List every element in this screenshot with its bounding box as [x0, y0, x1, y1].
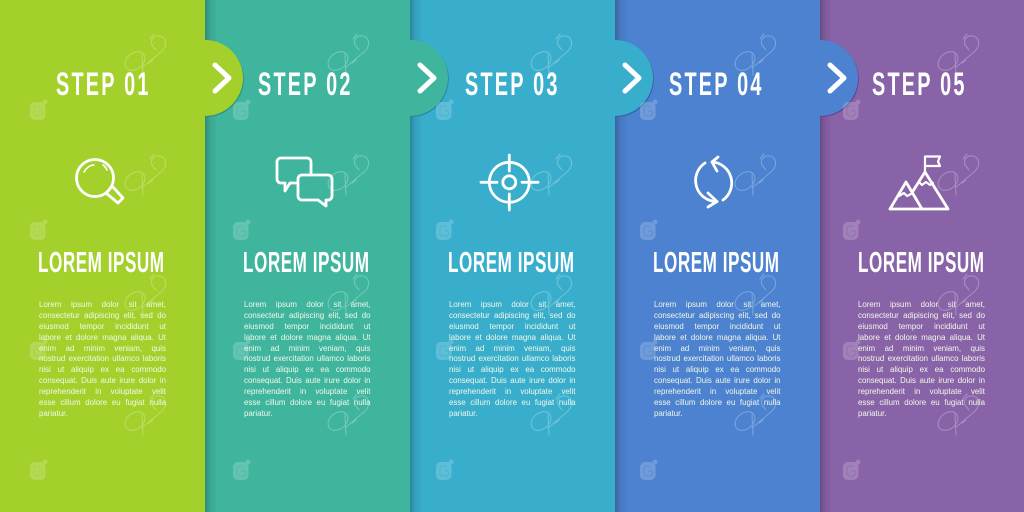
panel: step 04 — [615, 0, 820, 512]
icon: mountain with flag — [890, 156, 948, 209]
text block: nisi ut aliquip ex ea commodo — [449, 365, 576, 374]
text block: eiusmod tempor incididunt ut — [39, 322, 166, 331]
text block: Lorem ipsum dolor sit amet, — [858, 300, 985, 309]
icon: magnifying glass — [76, 160, 123, 203]
text block: consequat. Duis aute irure dolor in — [449, 376, 576, 385]
text block: consectetur adipiscing elit, sed do — [449, 311, 576, 320]
text block: pariatur. — [244, 409, 273, 418]
title: lorem ipsum: LOREM IPSUM — [858, 247, 985, 278]
text block: enim ad minim veniam, quis — [654, 344, 780, 352]
text block: labore et dolore magna aliqua. Ut — [449, 333, 576, 342]
text block — [244, 300, 370, 421]
tab arrow: step 01 to 02 — [205, 40, 244, 117]
text block: nisi ut aliquip ex ea commodo — [39, 365, 166, 374]
text block: esse cillum dolore eu fugiat nulla — [858, 398, 985, 407]
text block: enim ad minim veniam, quis — [858, 344, 985, 352]
text block: labore et dolore magna aliqua. Ut — [858, 333, 985, 342]
watermark pattern — [121, 34, 979, 435]
text block: reprehenderit in voluptate velit — [449, 387, 576, 396]
title: lorem ipsum: LOREM IPSUM — [448, 247, 575, 278]
text block: consequat. Duis aute irure dolor in — [654, 376, 780, 385]
heading: step 05: STEP 05 — [872, 66, 967, 102]
text block: nostrud exercitation ullamco laboris — [449, 354, 576, 363]
text block: consequat. Duis aute irure dolor in — [39, 376, 166, 385]
panel: step 05 — [820, 0, 1024, 512]
text block: enim ad minim veniam, quis — [39, 344, 166, 352]
text block: consectetur adipiscing elit, sed do — [39, 311, 166, 320]
text block: esse cillum dolore eu fugiat nulla — [449, 398, 576, 407]
icon: target — [481, 155, 538, 210]
text block: nostrud exercitation ullamco laboris — [39, 354, 166, 363]
text block: nostrud exercitation ullamco laboris — [244, 354, 370, 363]
text block: labore et dolore magna aliqua. Ut — [244, 333, 370, 342]
text block: nisi ut aliquip ex ea commodo — [858, 365, 985, 374]
text block: eiusmod tempor incididunt ut — [449, 322, 576, 331]
text block: consectetur adipiscing elit, sed do — [244, 311, 370, 320]
text block: labore et dolore magna aliqua. Ut — [654, 333, 780, 342]
watermark marks — [30, 100, 860, 480]
text block: consequat. Duis aute irure dolor in — [858, 376, 985, 385]
tab arrow: step 03 to 04 — [615, 40, 654, 117]
text block: Lorem ipsum dolor sit amet, — [449, 300, 576, 309]
text block: consectetur adipiscing elit, sed do — [654, 311, 780, 320]
text block: eiusmod tempor incididunt ut — [654, 322, 780, 331]
text block — [39, 300, 166, 421]
icon: sync arrows — [696, 157, 732, 207]
text block: reprehenderit in voluptate velit — [244, 387, 370, 396]
text block: pariatur. — [39, 409, 68, 418]
text block: Lorem ipsum dolor sit amet, — [654, 300, 780, 309]
title: lorem ipsum: LOREM IPSUM — [243, 247, 370, 278]
text block: pariatur. — [654, 409, 683, 418]
text block: eiusmod tempor incididunt ut — [858, 322, 985, 331]
text block: nostrud exercitation ullamco laboris — [654, 354, 780, 363]
text block: Lorem ipsum dolor sit amet, — [244, 300, 370, 309]
text block: consequat. Duis aute irure dolor in — [244, 376, 370, 385]
heading: step 04: STEP 04 — [669, 66, 764, 102]
text block: eiusmod tempor incididunt ut — [244, 322, 370, 331]
heading: step 02: STEP 02 — [258, 66, 353, 102]
text block — [858, 300, 985, 421]
text block: consectetur adipiscing elit, sed do — [858, 311, 985, 320]
text block: reprehenderit in voluptate velit — [858, 387, 985, 396]
text block — [654, 300, 780, 421]
panel: step 01 — [0, 0, 205, 512]
text block — [449, 300, 576, 421]
text block: esse cillum dolore eu fugiat nulla — [39, 398, 166, 407]
text block: labore et dolore magna aliqua. Ut — [39, 333, 166, 342]
panel: step 02 — [205, 0, 410, 512]
text block: Lorem ipsum dolor sit amet, — [39, 300, 166, 309]
text block: reprehenderit in voluptate velit — [654, 387, 780, 396]
heading: step 01: STEP 01 — [56, 66, 151, 102]
text block: pariatur. — [449, 409, 478, 418]
text block: reprehenderit in voluptate velit — [39, 387, 166, 396]
text block: enim ad minim veniam, quis — [244, 344, 370, 352]
text block: pariatur. — [858, 409, 887, 418]
title: lorem ipsum: LOREM IPSUM — [653, 247, 780, 278]
tab arrow: step 02 to 03 — [410, 40, 449, 117]
panel: step 03 — [410, 0, 615, 512]
icon: chat bubbles — [277, 158, 332, 206]
text block: esse cillum dolore eu fugiat nulla — [244, 398, 370, 407]
text block: nostrud exercitation ullamco laboris — [858, 354, 985, 363]
title: lorem ipsum: LOREM IPSUM — [38, 247, 165, 278]
text block: esse cillum dolore eu fugiat nulla — [654, 398, 780, 407]
text block: enim ad minim veniam, quis — [449, 344, 576, 352]
heading: step 03: STEP 03 — [465, 66, 560, 102]
tab arrow: step 04 to 05 — [820, 40, 859, 117]
text block: nisi ut aliquip ex ea commodo — [244, 365, 370, 374]
text block: nisi ut aliquip ex ea commodo — [654, 365, 780, 374]
